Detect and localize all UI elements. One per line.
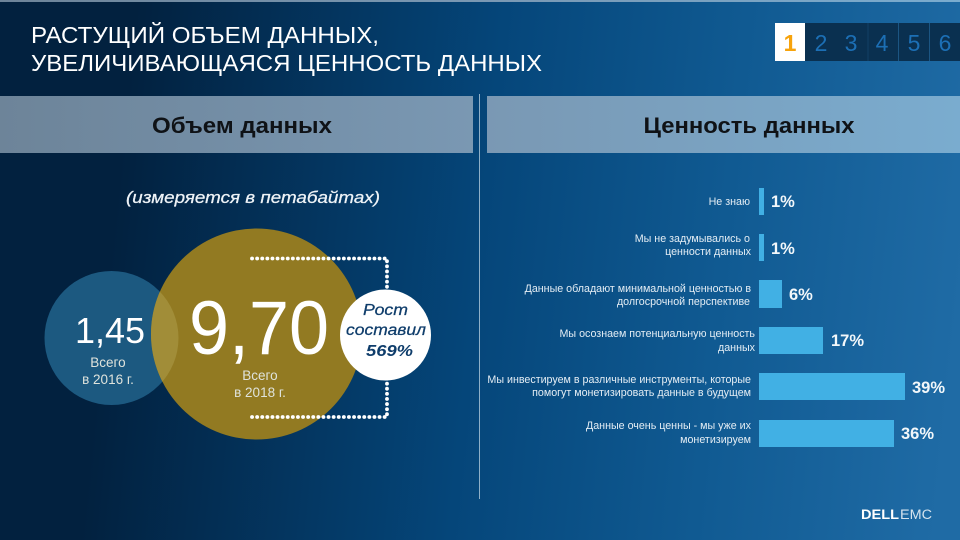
bar: minimal long-term value: Данные обладают минимальной ценностью в xyxy=(525,283,751,295)
bar: never thought about it: 1% xyxy=(771,240,795,258)
circle: 2018 volume xyxy=(151,228,362,440)
slide navigation 1-6 xyxy=(775,23,960,61)
slide navigation 1-6: 3 xyxy=(845,30,857,56)
header: data volume: Объем данных xyxy=(152,113,333,138)
header: data value: Ценность данных xyxy=(644,113,855,138)
circle: 2016 volume: Всего xyxy=(90,355,126,370)
bar: never thought about it xyxy=(635,233,795,261)
bar: investing in tools: 39% xyxy=(912,379,945,397)
circle: 2016 volume: 1,45 xyxy=(75,310,145,351)
bar chart: data value xyxy=(487,188,945,447)
bar: minimal long-term value: 6% xyxy=(789,286,813,304)
bar: recognise potential value: данных xyxy=(718,342,756,354)
callout: growth 569% xyxy=(340,290,431,380)
callout: growth 569%: составил xyxy=(346,322,426,339)
bar: never thought about it: Мы не задумывались о xyxy=(635,233,750,245)
bar: investing in tools xyxy=(487,373,945,400)
title xyxy=(31,21,542,76)
title: УВЕЛИЧИВАЮЩАЯСЯ ЦЕННОСТЬ ДАННЫХ xyxy=(31,50,542,76)
slide navigation 1-6: 5 xyxy=(908,30,920,56)
slide navigation 1-6: 6 xyxy=(939,30,951,56)
logo: Dell EMC: DELL xyxy=(861,507,899,522)
bar: already monetising: Данные очень ценны - мы уже их xyxy=(586,420,752,432)
title: РАСТУЩИЙ ОБЪЕМ ДАННЫХ, xyxy=(31,21,379,48)
circle: 2018 volume: в 2018 г. xyxy=(234,385,286,400)
header: data value xyxy=(487,96,960,153)
bar: investing in tools: Мы инвестируем в различные инструменты, которые xyxy=(487,374,751,386)
dotted growth bracket xyxy=(252,258,387,417)
circle: 2016 volume: в 2016 г. xyxy=(82,372,134,387)
bar: do not know: 1% xyxy=(771,193,795,211)
bar: already monetising xyxy=(586,420,934,447)
callout: growth 569%: Рост xyxy=(363,302,408,319)
circle: 2018 volume: 9,70 xyxy=(189,286,329,371)
logo: Dell EMC xyxy=(861,507,932,522)
bar: already monetising: 36% xyxy=(901,425,934,443)
bar: minimal long-term value: долгосрочной перспективе xyxy=(617,296,750,308)
bar: recognise potential value: 17% xyxy=(831,332,864,350)
bar: never thought about it: ценности данных xyxy=(665,246,752,258)
slide navigation 1-6: 2 xyxy=(815,30,827,56)
bar: minimal long-term value xyxy=(525,280,813,308)
logo: Dell EMC: EMC xyxy=(900,507,932,522)
bar: investing in tools: помогут монетизировать данные в будущем xyxy=(532,387,751,399)
circle: 2018 volume: Всего xyxy=(242,368,278,383)
slide navigation 1-6: 1 xyxy=(784,30,797,56)
slide navigation 1-6: 4 xyxy=(876,30,889,56)
bar: recognise potential value: Мы осознаем потенциальную ценность xyxy=(560,328,755,340)
callout: growth 569%: 569% xyxy=(366,343,413,360)
bar: already monetising: монетизируем xyxy=(680,434,751,446)
circle: 2016 volume xyxy=(44,271,178,405)
bar: do not know: Не знаю xyxy=(709,196,750,208)
bar: recognise potential value xyxy=(560,327,864,354)
header: data volume xyxy=(0,96,473,153)
bar: do not know xyxy=(709,188,795,215)
subtitle: measured in petabytes: (измеряется в петабайтах) xyxy=(126,189,380,207)
